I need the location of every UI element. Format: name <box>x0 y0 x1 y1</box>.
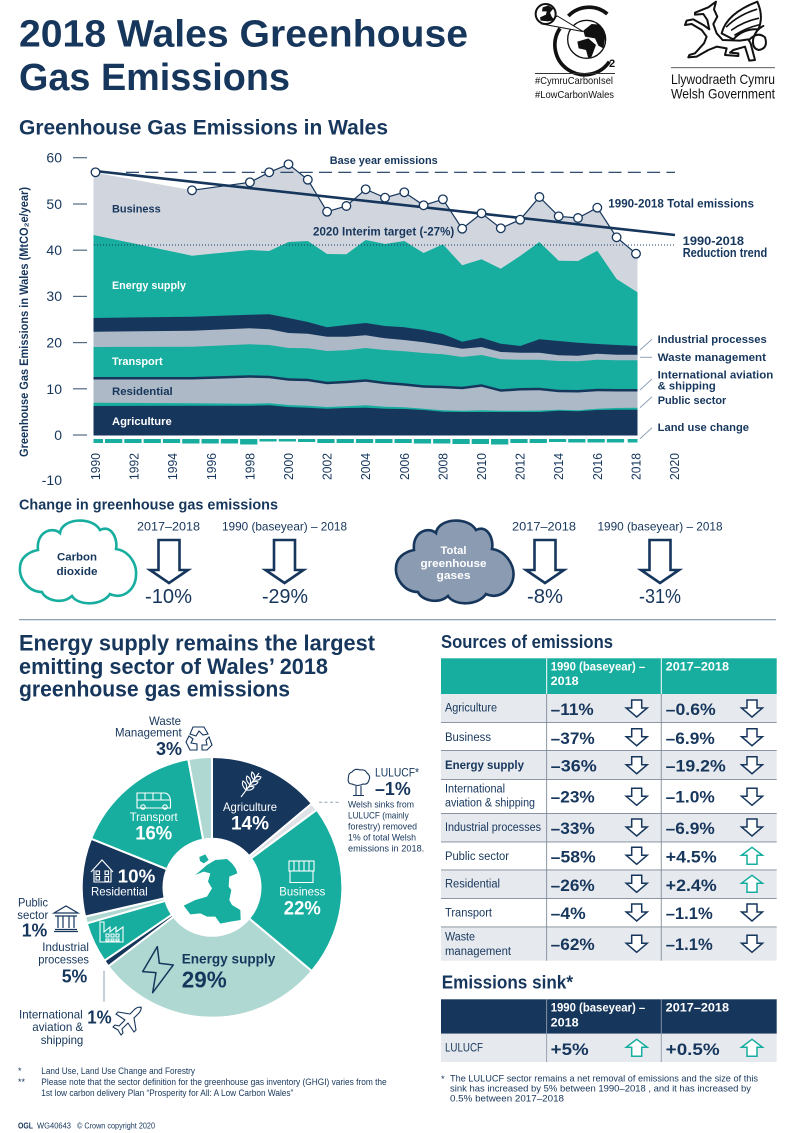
row: residential <box>445 875 762 895</box>
table: emissions sink: +5% <box>551 1040 589 1059</box>
label: transport: 16% <box>135 823 172 844</box>
note: LULUCF sink: * <box>441 1074 445 1085</box>
label: agriculture: 14% <box>231 813 269 834</box>
row: international aviation and shipping: –23% <box>551 788 595 807</box>
table: emissions sink: 1990 (baseyear) – <box>551 1001 646 1015</box>
x axis labels: 2018 <box>629 453 643 480</box>
area: industrial processes <box>94 314 638 436</box>
row: transport: –1.1% <box>666 904 713 923</box>
line annotations: Reduction trend <box>683 246 767 260</box>
label: LULUCF: forestry) removed <box>348 822 417 833</box>
table: sources of emissions <box>441 658 777 961</box>
row: agriculture: Agriculture <box>445 703 497 715</box>
label: residential: 10% <box>118 866 155 886</box>
label: industrial processes: Industrial <box>42 940 89 954</box>
label: LULUCF: Welsh sinks from <box>348 800 414 811</box>
label: LULUCF: LULUCF* <box>375 766 419 780</box>
cloud: total greenhouse gases: gases <box>436 570 470 582</box>
row: residential: –26% <box>551 876 595 895</box>
heading: greenhouse gas emissions in Wales: Greenhouse Gas Emissions in Wales <box>19 116 388 139</box>
x axis labels: 1992 <box>128 453 142 480</box>
logo: low carbon Wales <box>535 4 615 101</box>
heading: energy supply largest sector: greenhouse gas emissions <box>19 677 290 702</box>
row: international aviation and shipping: –1.0% <box>666 788 715 807</box>
x axis labels: 2012 <box>514 453 528 480</box>
label: business: Business <box>279 885 325 899</box>
row: waste management: –1.1% <box>666 935 713 954</box>
label: international aviation and shipping: 1% <box>87 1007 112 1027</box>
label: international aviation and shipping <box>19 971 141 1047</box>
footnotes: 1st low carbon delivery Plan “Prosperity for All: A Low Carbon Wales” <box>41 1088 293 1098</box>
area labels: Agriculture <box>112 416 172 428</box>
stat: total greenhouse gases 1990-2018: 1990 (baseyear) – 2018 <box>598 520 723 534</box>
title: Gas Emissions <box>19 57 290 99</box>
icon: public building <box>54 906 78 932</box>
label: industrial processes: processes <box>38 952 89 966</box>
logo: low carbon Wales: #LowCarbonWales <box>535 89 614 101</box>
heading: energy supply largest sector: Energy supply remains the largest <box>19 631 376 656</box>
row: agriculture: –0.6% <box>666 700 716 719</box>
x axis labels: 2006 <box>398 453 412 480</box>
icon: house <box>91 860 113 882</box>
icon: factory <box>100 922 123 942</box>
segment: residential <box>82 839 212 917</box>
logo: Welsh Government dragon <box>671 2 775 101</box>
x axis labels: 2002 <box>321 453 335 480</box>
row: residential: +2.4% <box>666 876 717 895</box>
table: emissions sink <box>441 999 777 1062</box>
icon: shop <box>289 861 314 882</box>
row: international aviation and shipping: International <box>445 783 505 795</box>
table: emissions sink: 2017–2018 <box>666 1001 729 1015</box>
segment: business <box>212 810 342 971</box>
area labels: Residential <box>112 386 173 398</box>
row: energy supply <box>445 757 762 776</box>
y axis: 50 <box>46 196 62 212</box>
y axis: -10 <box>42 472 62 488</box>
x axis labels: 2010 <box>475 453 489 480</box>
row: energy supply: Energy supply <box>445 760 525 772</box>
cloud: carbon dioxide <box>20 521 136 603</box>
row: transport: –4% <box>551 904 586 923</box>
row: energy supply: –19.2% <box>666 757 726 776</box>
label: public sector: 1% <box>22 921 47 941</box>
label: residential: Residential <box>91 885 148 899</box>
area labels <box>112 204 187 428</box>
title: 2018 Wales Greenhouse <box>19 14 468 56</box>
icon: map of Wales <box>184 854 241 924</box>
label: LULUCF: –1% <box>375 779 411 799</box>
y axis: 10 <box>46 381 62 397</box>
x axis labels: 2000 <box>282 453 296 480</box>
icon: wheat <box>241 772 261 797</box>
label: public sector: sector <box>17 908 48 922</box>
row: business: –6.9% <box>666 729 715 748</box>
row: business: Business <box>445 732 491 744</box>
row: waste management <box>445 932 762 958</box>
label: LULUCF: LULUCF (mainly <box>348 811 409 822</box>
area labels: Energy supply <box>112 280 187 292</box>
y axis <box>19 150 87 488</box>
row: waste management: –62% <box>551 935 595 954</box>
logo: Welsh Government dragon: Welsh Government <box>671 85 775 101</box>
x axis labels: 1998 <box>243 453 257 480</box>
logo: Welsh Government dragon: Llywodraeth Cymru <box>671 71 775 87</box>
icon: plane <box>113 1007 141 1035</box>
row shading <box>441 694 777 961</box>
label: waste management: Waste <box>149 714 181 728</box>
table header: 2018 <box>551 674 579 688</box>
x axis labels <box>89 453 682 480</box>
label: waste management: 3% <box>156 739 182 759</box>
x axis labels: 2016 <box>591 453 605 480</box>
cloud: carbon dioxide: Carbon <box>57 552 97 564</box>
area: international aviation and shipping <box>94 375 638 436</box>
label: waste management: Management <box>115 726 182 740</box>
area: residential <box>94 378 638 436</box>
line annotations: 1990-2018 Total emissions <box>608 197 754 211</box>
row: public sector: –58% <box>551 848 596 867</box>
area labels: Business <box>112 204 161 216</box>
heading: sources of emissions: Sources of emissions <box>441 631 613 652</box>
x axis labels: 1996 <box>205 453 219 480</box>
segment: agriculture <box>212 757 312 887</box>
area: agriculture <box>94 405 638 436</box>
footnotes: * <box>18 1066 22 1076</box>
row: agriculture: –11% <box>551 700 594 719</box>
footnotes: Please note that the sector definition for the greenhouse gas inventory (GHGI) varies from the <box>41 1077 387 1087</box>
y axis: 30 <box>46 288 62 304</box>
segment: waste management <box>188 757 212 887</box>
note: LULUCF sink <box>441 1074 758 1105</box>
row: residential: Residential <box>445 879 500 891</box>
bars: land use change <box>94 439 638 444</box>
label: energy supply: 29% <box>182 966 227 992</box>
line annotations <box>313 155 767 260</box>
line annotations: 2020 Interim target (-27%) <box>313 227 454 239</box>
label: LULUCF: 1% of total Welsh <box>348 833 416 844</box>
credits: © Crown copyright 2020 <box>77 1121 155 1131</box>
x axis labels: 1990 <box>89 453 103 480</box>
row: industrial processes: –6.9% <box>666 819 715 838</box>
line annotations: Base year emissions <box>330 155 438 167</box>
label: business: 22% <box>284 898 321 919</box>
stat: carbon dioxide 2017-2018 <box>137 520 200 608</box>
row: public sector <box>445 847 762 867</box>
row: waste management: management <box>445 946 512 958</box>
segment: transport <box>91 759 212 887</box>
label: LULUCF <box>319 766 424 855</box>
label: agriculture: Agriculture <box>223 800 277 814</box>
row: public sector: Public sector <box>445 851 509 863</box>
row: agriculture <box>445 700 762 719</box>
segment: energy supply <box>108 887 312 1018</box>
side legend with leader lines: & shipping <box>658 380 716 392</box>
label: energy supply <box>143 947 276 993</box>
note: LULUCF sink: 0.5% between 2017–2018 <box>450 1094 564 1105</box>
note: LULUCF sink: sink has increased by 5% between 1990–2018 , and it has increased by <box>450 1084 751 1095</box>
note: LULUCF sink: The LULUCF sector remains a net removal of emissions and the size of this <box>450 1074 758 1085</box>
area: transport <box>94 344 638 436</box>
stat: carbon dioxide 1990-2018 <box>222 520 347 608</box>
x axis labels: 2008 <box>436 453 450 480</box>
icon: bus <box>137 793 170 809</box>
stat: total greenhouse gases 1990-2018 <box>598 520 723 608</box>
heading: change: Change in greenhouse gas emissions <box>19 496 278 513</box>
heading: emissions sink: Emissions sink* <box>442 972 574 993</box>
stat: carbon dioxide 2017-2018: -10% <box>145 586 192 608</box>
interim target dotted line <box>94 244 675 246</box>
table header: 1990 (baseyear) – <box>551 660 646 674</box>
cloud: total greenhouse gases <box>396 521 514 603</box>
panel: change in greenhouse gas emissions <box>19 496 723 608</box>
side legend with leader lines: Industrial processes <box>658 334 767 346</box>
table header <box>441 658 777 694</box>
footnotes: Land Use, Land Use Change and Forestry <box>41 1066 195 1076</box>
stat: total greenhouse gases 2017-2018 <box>512 520 576 608</box>
area: public sector <box>94 403 638 436</box>
cloud: carbon dioxide: dioxide <box>56 566 98 578</box>
x axis labels: 2020 <box>668 453 682 480</box>
side legend with leader lines: Public sector <box>658 395 727 407</box>
row: public sector: +4.5% <box>666 848 717 867</box>
row: industrial processes: Industrial processes <box>445 822 541 834</box>
line: reduction trend <box>95 171 675 235</box>
label: international aviation and shipping: International <box>19 1007 83 1021</box>
label: transport: Transport <box>130 810 178 824</box>
line: total emissions <box>91 160 675 258</box>
icon: tree <box>348 769 370 796</box>
side legend with leader lines: Land use change <box>658 422 749 434</box>
row: industrial processes <box>445 819 762 838</box>
footnotes: ** <box>18 1077 26 1087</box>
segment: industrial processes <box>87 887 212 961</box>
table: emissions sink: +0.5% <box>666 1040 720 1059</box>
stat: total greenhouse gases 2017-2018: 2017–2018 <box>512 520 576 534</box>
icon: lightning bolt <box>143 947 173 993</box>
area: waste management <box>94 328 638 436</box>
base year dashed line <box>126 171 675 173</box>
side legend with leader lines <box>640 334 774 439</box>
row: transport <box>445 904 762 923</box>
stacked area chart <box>19 150 774 488</box>
donut chart: sector shares <box>17 714 424 1047</box>
label: international aviation and shipping: aviation & <box>32 1020 83 1034</box>
label: international aviation and shipping: shipping <box>41 1033 83 1047</box>
segment: international aviation <box>104 887 212 966</box>
icon: recycling <box>186 727 212 750</box>
area labels: Transport <box>112 356 163 368</box>
label: industrial processes: 5% <box>62 967 87 987</box>
row: international aviation and shipping: aviation & shipping <box>445 798 535 810</box>
row: waste management: Waste <box>445 932 475 944</box>
label: transport <box>130 793 178 844</box>
label: waste management <box>115 714 212 759</box>
area: business <box>94 164 638 436</box>
credits: OGL <box>18 1121 33 1131</box>
row: industrial processes: –33% <box>551 819 595 838</box>
x axis labels: 1994 <box>166 453 180 480</box>
table: emissions sink: 2018 <box>551 1016 579 1030</box>
label: public sector: Public <box>18 896 48 910</box>
y axis: 60 <box>46 150 62 166</box>
cloud: total greenhouse gases: greenhouse <box>420 558 486 570</box>
y axis: Greenhouse Gas Emissions in Wales (MtCO₂e/year) <box>19 187 31 457</box>
label: agriculture <box>223 772 277 834</box>
logo: low carbon Wales: 2 <box>609 58 615 70</box>
side legend with leader lines: Waste management <box>658 352 766 364</box>
credits <box>18 1121 155 1131</box>
y axis: 0 <box>54 427 62 443</box>
stat: carbon dioxide 2017-2018: 2017–2018 <box>137 520 200 534</box>
stat: total greenhouse gases 2017-2018: -8% <box>527 586 563 608</box>
heading: energy supply largest sector: emitting sector of Wales’ 2018 <box>19 654 328 679</box>
y axis: 40 <box>46 242 62 258</box>
row: international aviation and shipping <box>445 783 762 810</box>
row: energy supply: –36% <box>551 757 597 776</box>
side legend with leader lines: International aviation <box>658 369 774 381</box>
title <box>19 14 468 99</box>
x axis labels: 2004 <box>359 453 373 480</box>
footnotes <box>18 1066 387 1098</box>
y axis: 20 <box>46 334 62 350</box>
label: energy supply: Energy supply <box>182 950 276 966</box>
cloud: total greenhouse gases: Total <box>440 545 466 557</box>
table: emissions sink: LULUCF <box>445 1043 483 1055</box>
segment: public sector <box>85 887 212 923</box>
label: public sector <box>17 896 78 941</box>
label: LULUCF: emissions in 2018. <box>348 844 424 855</box>
segment: LULUCF <box>212 804 317 887</box>
table header: 2017–2018 <box>666 660 729 674</box>
x axis labels: 2014 <box>552 453 566 480</box>
row: transport: Transport <box>445 908 493 920</box>
stat: total greenhouse gases 1990-2018: -31% <box>639 586 681 608</box>
stat: carbon dioxide 1990-2018: 1990 (baseyear) – 2018 <box>222 520 347 534</box>
row: business <box>445 729 762 748</box>
area: energy supply <box>94 235 638 436</box>
stat: carbon dioxide 1990-2018: -29% <box>262 586 308 608</box>
row: business: –37% <box>551 729 595 748</box>
credits: WG40643 <box>37 1121 71 1131</box>
label: business <box>279 861 325 919</box>
line annotations: 1990-2018 <box>683 236 745 248</box>
logo: low carbon Wales: #CymruCarbonIsel <box>535 75 613 87</box>
heading: energy supply largest sector <box>19 631 376 702</box>
label: residential <box>91 860 155 899</box>
label: industrial processes <box>38 922 123 987</box>
